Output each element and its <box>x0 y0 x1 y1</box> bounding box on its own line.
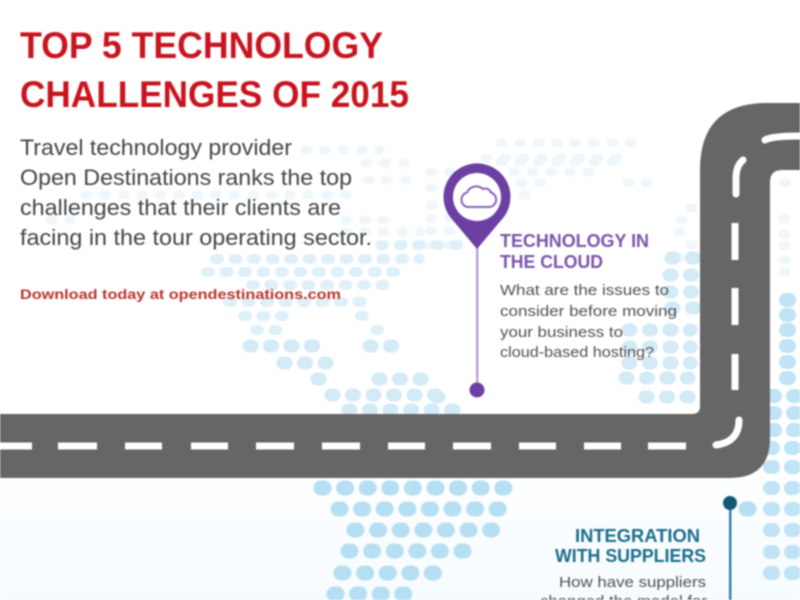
title: TOP 5 TECHNOLOGY <box>20 25 383 66</box>
title: CHALLENGES OF 2015 <box>20 74 409 115</box>
dotted world map: mid dots <box>206 245 460 330</box>
text: technology in the cloud: consider before moving <box>500 304 677 320</box>
road centre markings <box>0 136 800 446</box>
heading: technology in the cloud: TECHNOLOGY IN <box>500 231 649 251</box>
marker: integration with suppliers <box>723 496 737 600</box>
intro text: Open Destinations ranks the top <box>20 165 352 190</box>
pin <box>443 163 510 249</box>
text: integration with suppliers <box>540 575 707 600</box>
intro text: Travel technology provider <box>20 135 292 160</box>
marker end dot <box>723 496 737 510</box>
text: technology in the cloud: your business to <box>500 325 623 341</box>
icon: cloud <box>461 186 496 207</box>
dotted world map: strong lower dots <box>321 488 750 594</box>
marker: technology in the cloud <box>443 163 510 398</box>
intro text <box>20 135 372 250</box>
pin inner circle <box>453 173 501 221</box>
intro text: challenges that their clients are <box>20 195 341 220</box>
intro text: facing in the tour operating sector. <box>20 225 372 250</box>
download link: Download today at opendestinations.com <box>20 286 341 302</box>
dotted world map: centre dots <box>249 258 695 410</box>
dotted world map: right column dots <box>770 300 800 573</box>
lower background tint <box>0 470 800 600</box>
text: integration with suppliers: How have suppliers <box>559 575 706 591</box>
heading: technology in the cloud: THE CLOUD <box>500 252 603 272</box>
marker stem <box>476 245 478 387</box>
road <box>0 103 800 478</box>
dotted world map: faint upper dots <box>50 143 800 272</box>
text: technology in the cloud: cloud-based hosting? <box>500 345 654 361</box>
heading: technology in the cloud <box>500 231 649 272</box>
marker end dot <box>470 382 484 398</box>
text: technology in the cloud <box>500 283 677 361</box>
text: technology in the cloud: What are the issues to <box>500 283 669 299</box>
heading: integration with suppliers <box>555 526 706 566</box>
heading: integration with suppliers: WITH SUPPLIERS <box>555 546 706 566</box>
heading: integration with suppliers: INTEGRATION <box>575 526 700 546</box>
road surface <box>0 103 800 478</box>
marker stem <box>729 503 731 600</box>
title <box>20 25 409 115</box>
